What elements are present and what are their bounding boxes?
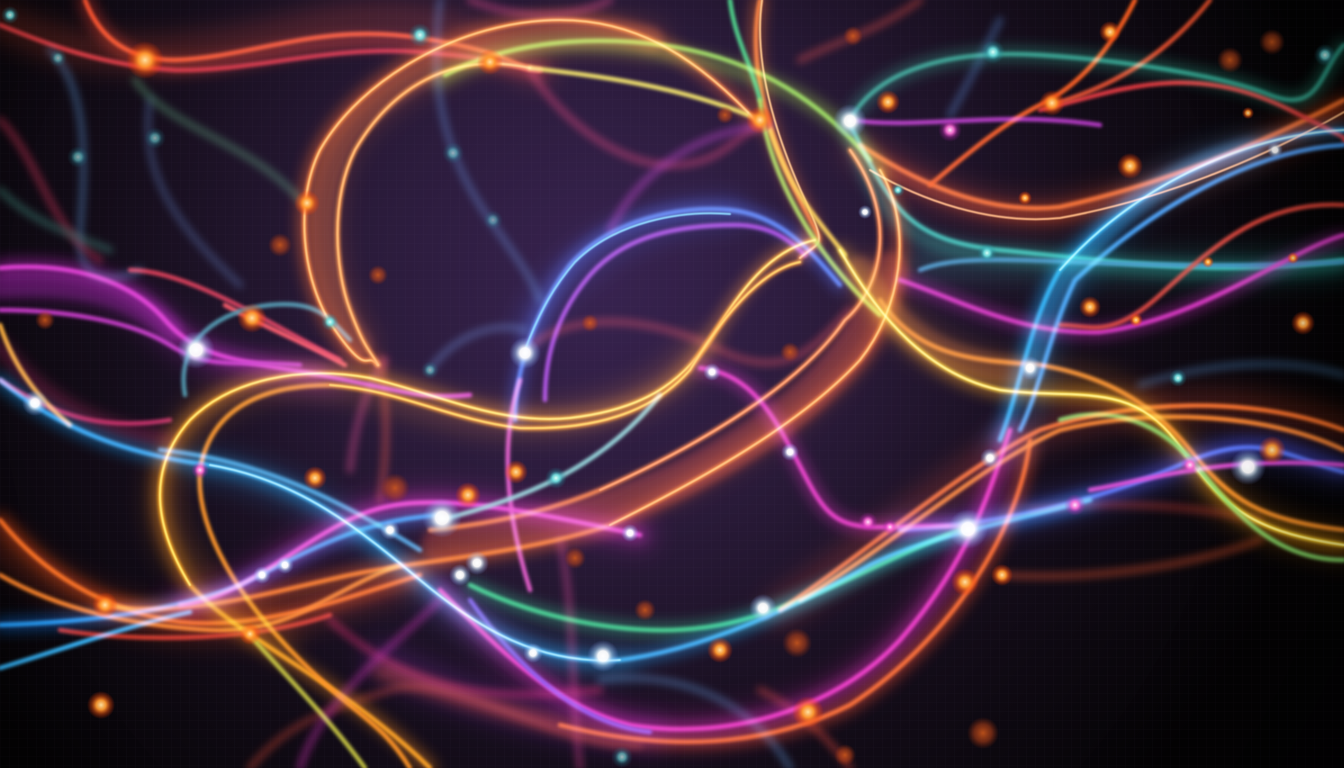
strand: bright blue curve, right <box>1000 130 1344 440</box>
strand: magenta ribbon, left <box>0 267 470 396</box>
strand: upper-right teal wave <box>850 45 1344 120</box>
strand: right teal and purple waves <box>850 119 1344 332</box>
strand: right green and yellow sweep <box>840 250 1344 560</box>
strand: lower-left orange waves <box>0 520 420 638</box>
strand: large orange loop, upper centre <box>304 20 760 365</box>
strand: top-left red wave <box>0 0 540 70</box>
glowing nodes: magenta <box>191 118 1200 535</box>
strand: right blue-violet band <box>900 446 1344 530</box>
strand: main yellow-orange ribbon <box>0 240 815 768</box>
glowing nodes: white <box>22 104 1283 672</box>
strand: central magenta curves <box>180 368 960 605</box>
strand: long blue and cyan sweep through lower centre <box>0 380 1090 660</box>
strand: wide orange ribbon, centre <box>100 150 900 609</box>
strand: right-side orange bundle <box>860 0 1344 219</box>
strand: green and yellow arc across the top <box>440 41 880 170</box>
strand: bright blue loop, centre <box>515 209 840 420</box>
strand: left red bands <box>0 345 170 440</box>
strand: magenta descending curve to the bottom <box>440 430 1010 732</box>
strand: green band, lower centre <box>470 530 960 630</box>
strand: top-centre orange and green falling strands <box>730 0 880 315</box>
strand: lower-left blue waves <box>0 515 440 668</box>
strand: orange lower-right sweeps <box>380 406 1344 742</box>
